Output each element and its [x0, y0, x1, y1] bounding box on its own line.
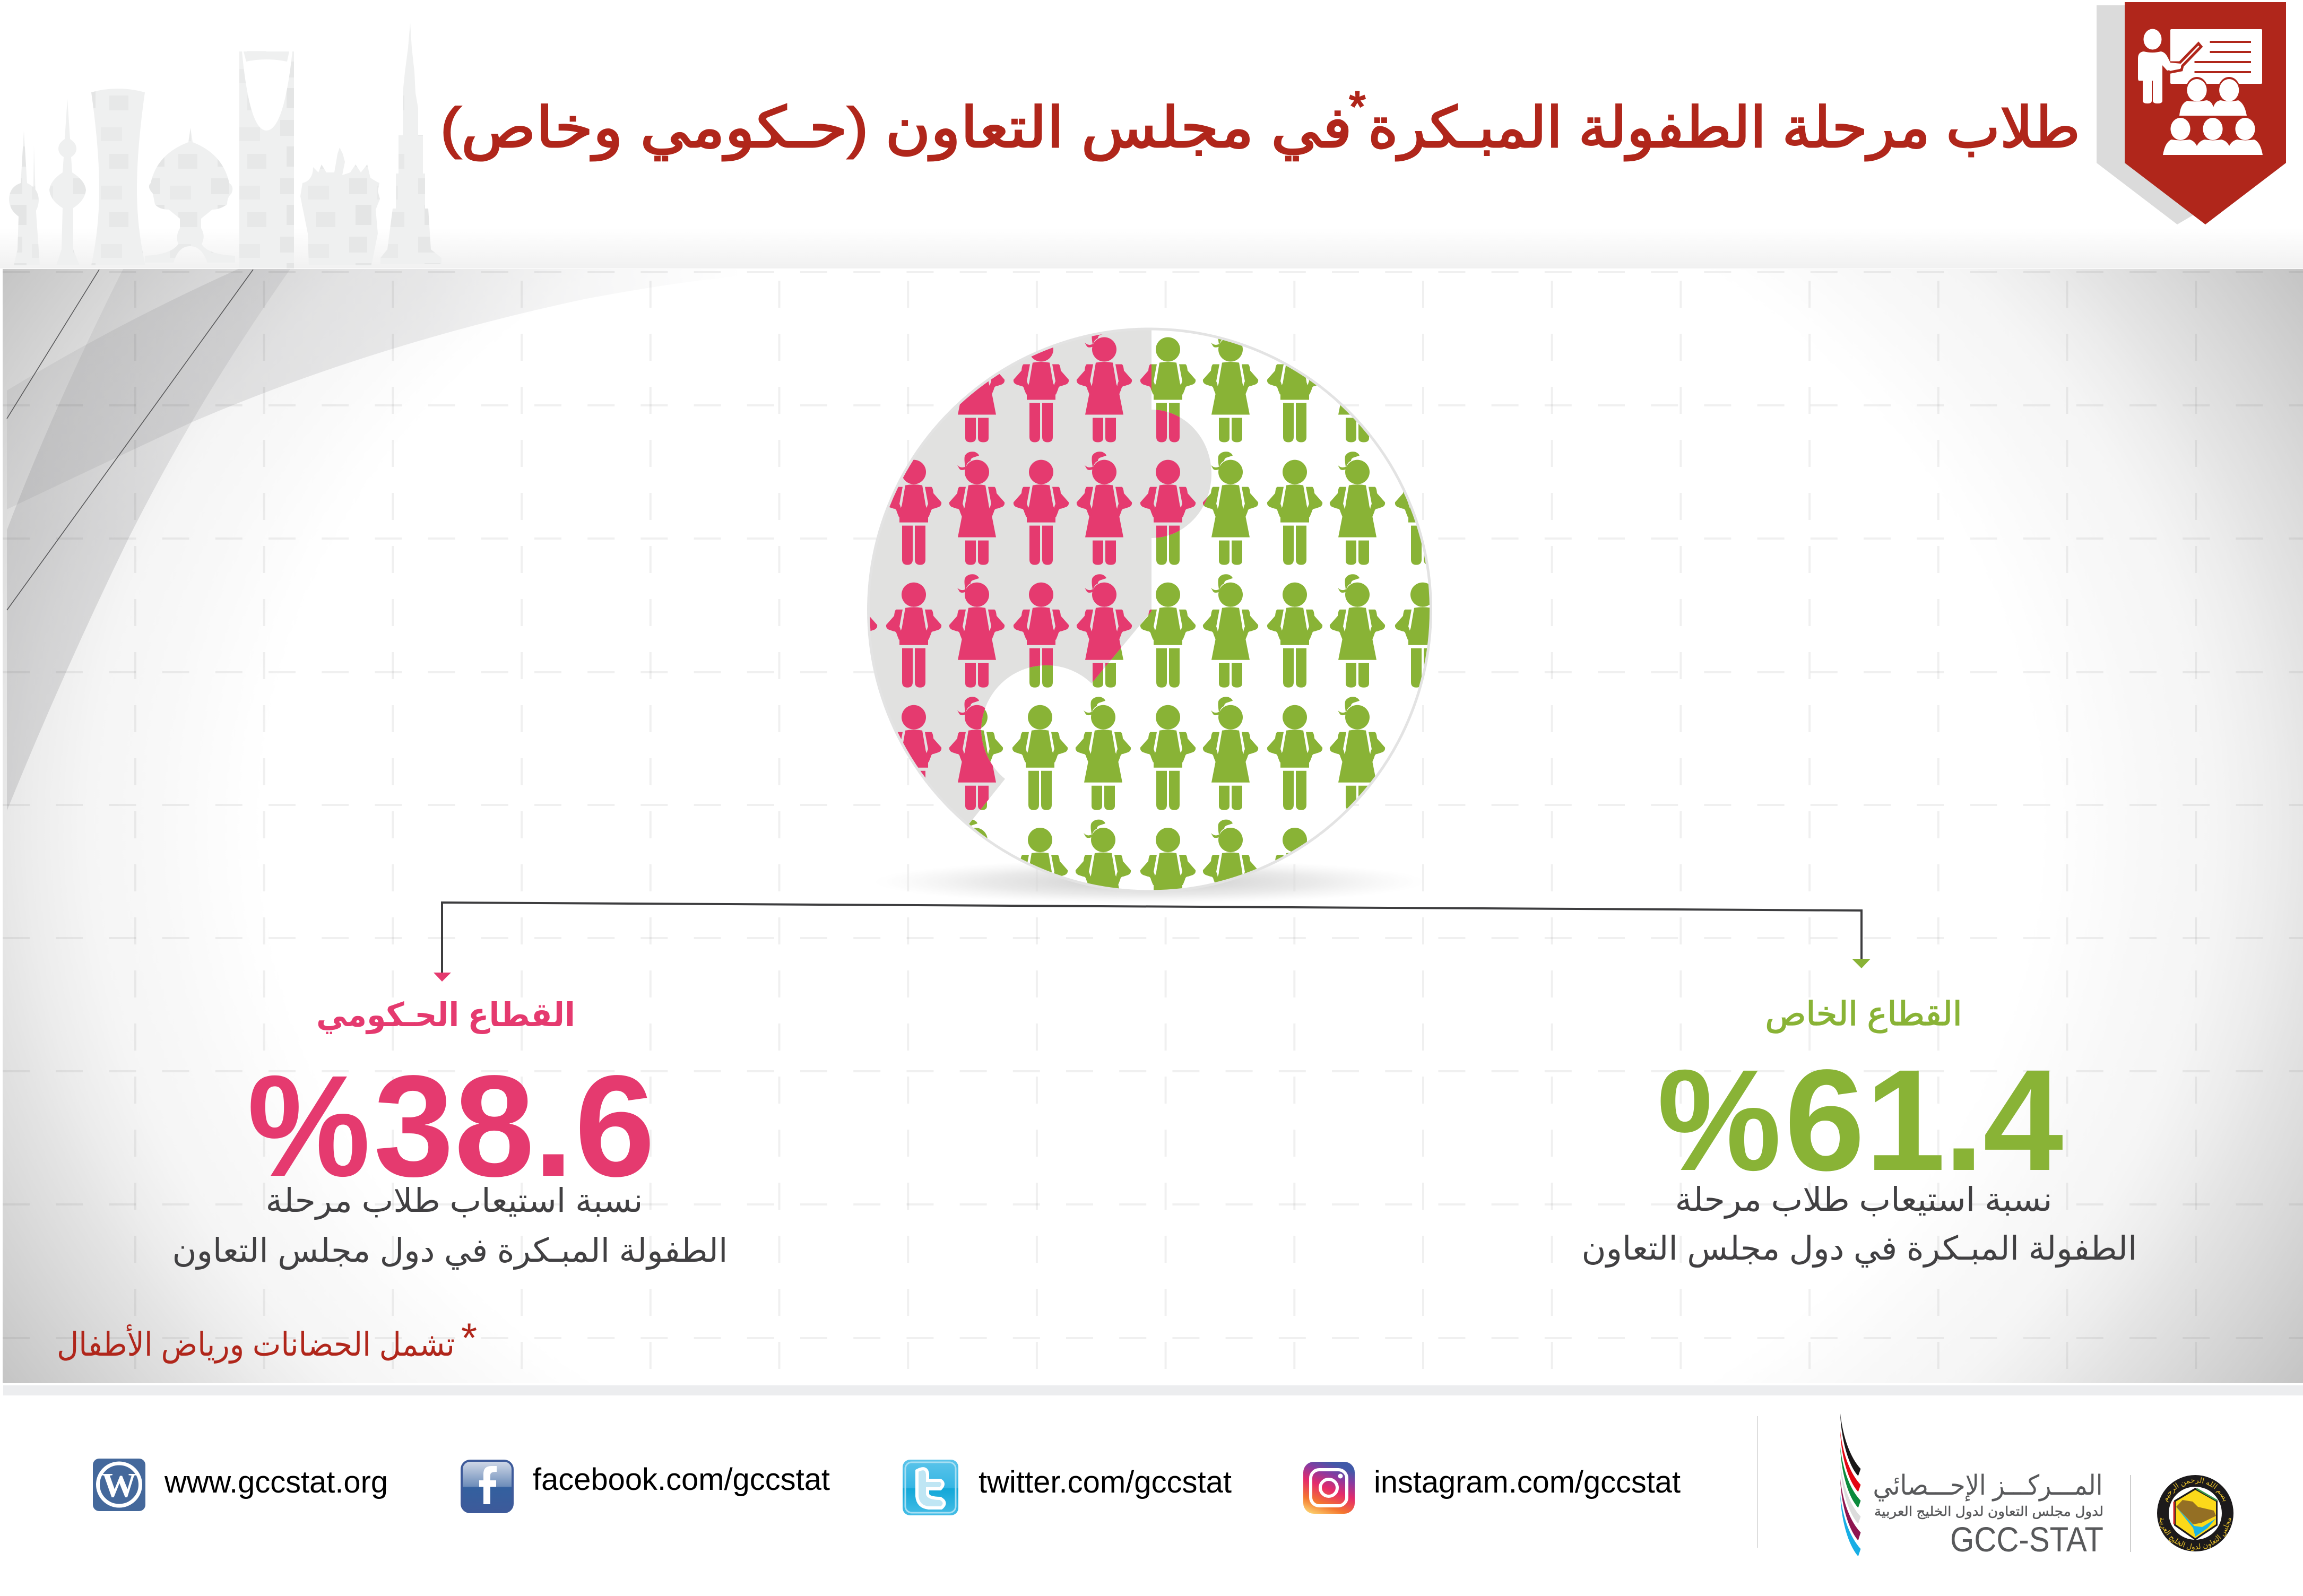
icon: facebook: [462, 1461, 513, 1512]
Doha curved tower: [91, 89, 145, 265]
header gradient: [0, 228, 2303, 268]
title left part: في مجلس التعاون (حـكومي وخاص): [440, 97, 1352, 161]
logo divider: [2130, 1475, 2131, 1552]
circle base: [868, 329, 1431, 891]
heading: القطاع الحـكومي: [316, 997, 575, 1034]
logo: GCC emblem: [2157, 1475, 2233, 1551]
swoosh shapes top left: [7, 269, 743, 811]
description: [1581, 1182, 2137, 1268]
heading: القطاع الخاص: [1765, 996, 1962, 1033]
footer divider: [1757, 1416, 1758, 1548]
percentage: %: [247, 1045, 370, 1207]
logo: GCC-STAT: [1840, 1413, 2103, 1559]
facebook text: facebook.com/gccstat: [533, 1462, 830, 1497]
icon: teacher and students: [2138, 29, 2263, 155]
footer band: [3, 1385, 2303, 1395]
jagged tower: [300, 148, 380, 265]
website text: www.gccstat.org: [164, 1465, 388, 1499]
badge: [2125, 2, 2286, 224]
icon: instagram: [1303, 1462, 1355, 1514]
private sector figures (green): [822, 329, 1450, 933]
Burj Khalifa: [380, 23, 441, 264]
footer: facebook: [462, 1461, 830, 1512]
icon: wordpress: [93, 1459, 145, 1511]
panel: private sector stats: [1581, 996, 2137, 1268]
footnote: *: [461, 1314, 477, 1361]
description: نسبة استيعاب طلاب مرحلة: [1675, 1182, 2053, 1219]
asterisk: *: [1349, 83, 1366, 130]
skyline of Gulf landmarks: [9, 23, 441, 268]
instagram text: instagram.com/gccstat: [1374, 1465, 1681, 1499]
domed landmark: [145, 128, 235, 263]
government sector figures (pink): [822, 329, 1450, 810]
badge shadow: [2097, 5, 2282, 224]
emblem ring text: بسم الله الرحمن الرحيم: [2165, 1477, 2226, 1503]
footer: website: [93, 1459, 388, 1511]
description: الطفولة المبـكرة في دول مجلس التعاون: [172, 1233, 728, 1270]
description: [172, 1183, 728, 1270]
logo: GCC emblem: مجلس التعاون لدول الخليج العربية: [2159, 1517, 2231, 1551]
Kuwait small tower: [9, 131, 40, 265]
government sector region (grey): [868, 329, 1211, 825]
panel: government sector stats: [172, 997, 728, 1270]
percentage: [1657, 1039, 2064, 1201]
circle outline: [868, 329, 1431, 891]
twitter text: twitter.com/gccstat: [979, 1465, 1232, 1499]
circle shadow: [874, 860, 1426, 904]
logo: subtitle in Arabic: لدول مجلس التعاون لدول الخليج العربية: [1874, 1504, 2103, 1520]
background grid dashes: [3, 272, 2303, 1380]
footer: twitter: [903, 1460, 1232, 1515]
Kingdom tower: [239, 51, 294, 268]
footer: instagram: [1303, 1462, 1681, 1514]
connector arrows: [434, 903, 1871, 982]
title: [440, 83, 2080, 161]
percentage: [247, 1045, 655, 1207]
description: نسبة استيعاب طلاب مرحلة: [265, 1183, 643, 1220]
percentage: 61.4: [1785, 1039, 2064, 1201]
logo: name in Arabic: المـــركـــز الإحـــصائي: [1873, 1470, 2102, 1502]
description: الطفولة المبـكرة في دول مجلس التعاون: [1581, 1230, 2137, 1268]
arrow: private: [1852, 959, 1871, 968]
panel: main background: [3, 269, 2303, 1395]
Kuwait tall tower: [49, 99, 86, 265]
percentage: %: [1657, 1039, 1781, 1201]
header icon badge: [2097, 2, 2286, 224]
title right part: طلاب مرحلة الطفولة المبـكرة: [1368, 97, 2080, 161]
footnote: تشمل الحضانات ورياض الأطفال: [57, 1324, 455, 1364]
icon: wordpress: W: [102, 1466, 137, 1505]
icon: twitter: [903, 1460, 958, 1515]
chart: pictogram circle: [867, 328, 1432, 900]
arrow: government: [434, 973, 451, 982]
logo: ribbon stripes: [1840, 1413, 1860, 1556]
percentage: 38.6: [374, 1045, 655, 1207]
logo: GCC-STAT wordmark: GCC-STAT: [1950, 1520, 2103, 1559]
